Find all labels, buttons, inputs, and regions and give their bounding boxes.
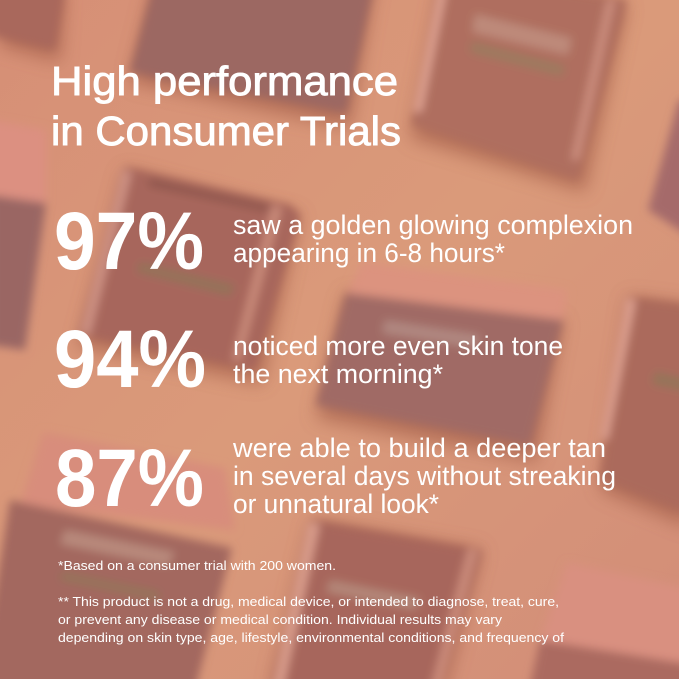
stat: 87% (55, 433, 616, 524)
package: top center (130, 0, 375, 113)
package: center left (78, 167, 300, 370)
description: golden complexion: appearing in 6-8 hours* (233, 238, 505, 268)
description: deeper tan: or unnatural look* (233, 489, 439, 519)
disclaimer: ** This product is not a drug, medical device, or intended to diagnose, treat, cure, (58, 594, 559, 609)
package: bottom center (270, 520, 482, 679)
description: golden complexion: saw a golden glowing complexion (233, 210, 633, 240)
description: even skin tone: the next morning* (233, 359, 443, 389)
disclaimer (58, 594, 564, 645)
disclaimer: or prevent any disease or medical condition. Individual results may vary (58, 612, 502, 627)
package: top left (0, 0, 65, 50)
description: deeper tan: in several days without streaking (233, 461, 616, 491)
description: deeper tan: were able to build a deeper tan (232, 433, 606, 463)
title: in Consumer Trials (51, 108, 401, 154)
disclaimer: depending on skin type, age, lifestyle, environmental conditions, and frequency of (58, 630, 564, 645)
description: even skin tone (233, 331, 563, 389)
description: even skin tone: noticed more even skin tone (233, 331, 563, 361)
title (51, 58, 401, 154)
footnote: consumer trial: *Based on a consumer trial with 200 women. (58, 558, 336, 573)
number: 97%: 97% (54, 196, 204, 287)
package: left edge (0, 120, 46, 350)
number: 94%: 94% (54, 314, 206, 405)
package: bottom left (0, 432, 235, 679)
stat: 97% (54, 196, 633, 287)
package: right (600, 297, 679, 515)
package: bottom right (528, 563, 679, 679)
package: top right (412, 0, 627, 180)
package: right top (648, 100, 679, 240)
number: 87%: 87% (55, 433, 204, 524)
package: center (316, 262, 568, 445)
description: deeper tan (232, 433, 616, 519)
stat: 94% (54, 314, 563, 405)
title: High performance (51, 58, 398, 104)
description: golden complexion (233, 210, 633, 268)
